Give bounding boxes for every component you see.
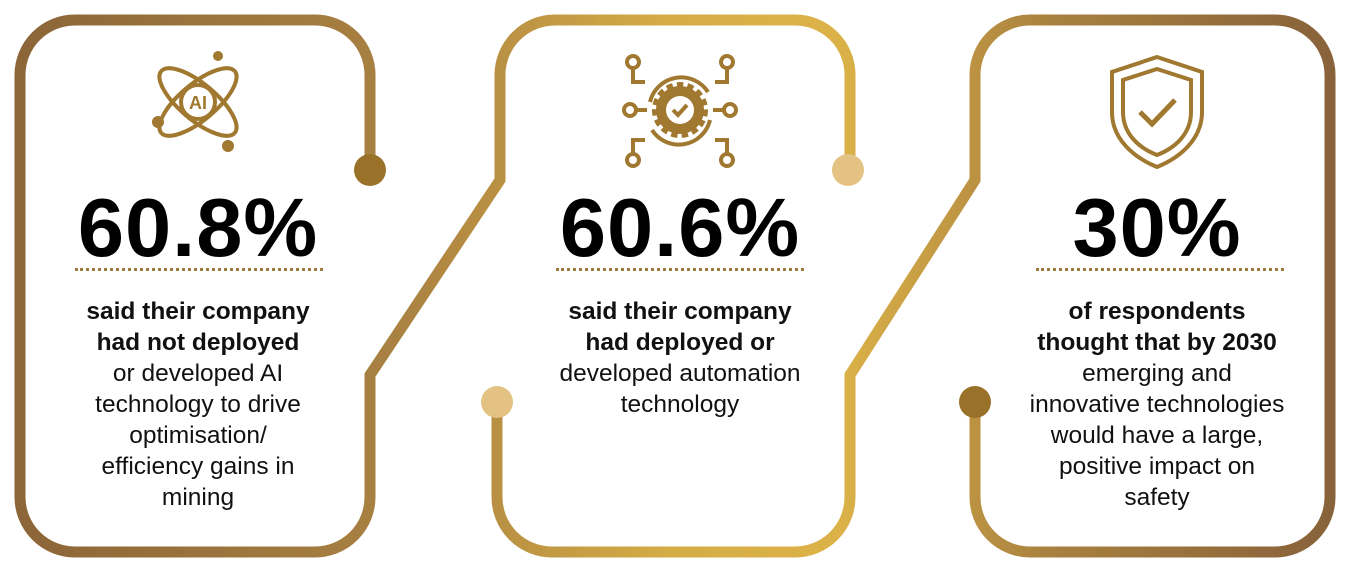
icon: automation gear — [622, 54, 738, 168]
stat 2 text: developed automation — [559, 360, 801, 387]
stat 3 text: innovative technologies — [1030, 391, 1284, 418]
stat 3 text: would have a large, — [1051, 422, 1263, 449]
stat 3 text — [1030, 298, 1284, 511]
stat 1 text: optimisation/ — [129, 422, 267, 449]
stat 2 number: 60.6% — [560, 181, 800, 274]
stat 3 text: emerging and — [1082, 360, 1232, 387]
stat 1 number: 60.8% — [78, 181, 318, 274]
stat 1 text: said their company — [86, 298, 310, 325]
stat 3 text: positive impact on — [1059, 453, 1255, 480]
stat 1 text — [86, 298, 310, 511]
stat 3 text: of respondents — [1069, 298, 1245, 325]
stat 3 text: safety — [1124, 484, 1190, 511]
stat 1 text: technology to drive — [95, 391, 301, 418]
stat 2 text: technology — [621, 391, 739, 418]
stat 1 text: mining — [162, 484, 234, 511]
stat 2 text: said their company — [568, 298, 792, 325]
stat 1 text: or developed AI — [113, 360, 283, 387]
stat 1 text: efficiency gains in — [102, 453, 294, 480]
stat 3 number: 30% — [1072, 181, 1242, 274]
stat 2 text — [559, 298, 801, 418]
stat 2 text: had deployed or — [585, 329, 775, 356]
icon: AI atom: AI — [189, 93, 207, 113]
icon: shield — [1110, 54, 1204, 170]
icon: AI atom — [152, 51, 239, 152]
stat 1 text: had not deployed — [97, 329, 299, 356]
stat 3 text: thought that by 2030 — [1037, 329, 1277, 356]
